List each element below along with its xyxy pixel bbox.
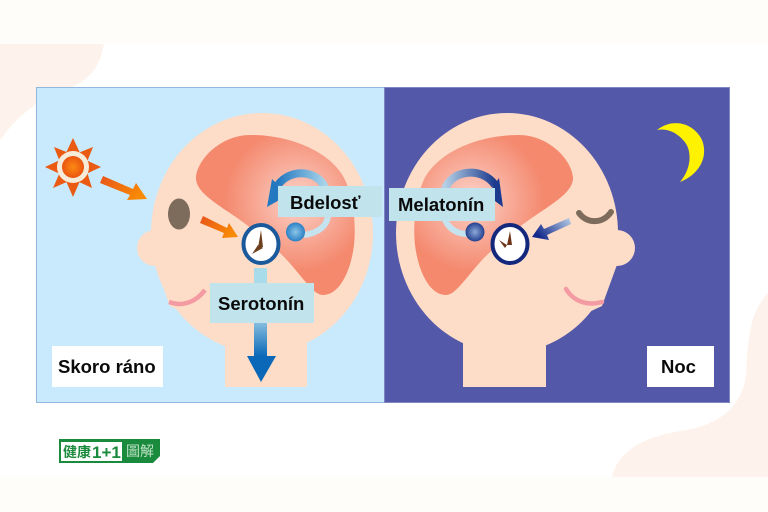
logo (59, 439, 160, 463)
cycle arrow: melatonin (445, 173, 503, 234)
mouth: morning (169, 290, 205, 304)
arrow: eye to clock (200, 216, 238, 238)
eye: open (168, 198, 190, 230)
brain: morning (196, 135, 355, 295)
logo: 健康 (63, 444, 91, 460)
mouth: night (566, 289, 602, 303)
background blob: bottom right (612, 293, 768, 477)
eye: closed (579, 212, 611, 221)
background blob: top left (0, 44, 104, 140)
label: Bdelosť (278, 186, 382, 217)
logo: 圖解 (126, 443, 154, 459)
cycle arrow: wakefulness (267, 173, 328, 235)
icon: moon (657, 123, 704, 182)
head: night (396, 113, 635, 387)
label: Bdelosť: Bdelosť (290, 192, 361, 213)
label: Noc: Noc (661, 356, 696, 377)
logo: 1+1 (92, 443, 121, 462)
icon: sun (45, 138, 101, 197)
clock: morning (244, 225, 278, 263)
panel: early morning (36, 88, 384, 402)
panel: night (384, 88, 730, 402)
clock: night (492, 225, 528, 263)
label: Skoro ráno: Skoro ráno (58, 356, 156, 377)
head: morning (137, 113, 373, 387)
label: Serotonín (210, 283, 314, 323)
ball: melatonin (466, 222, 484, 242)
label: Melatonín (389, 188, 495, 221)
label: Serotonín: Serotonín (218, 293, 304, 314)
arrow: sunlight to head (100, 176, 147, 200)
label: Melatonín: Melatonín (398, 194, 484, 215)
label: Skoro ráno (52, 346, 163, 387)
arrow: serotonin down (247, 268, 276, 382)
arrow: eye to clock, night (532, 218, 571, 240)
brain: night (414, 135, 573, 295)
ball: serotonin (286, 222, 305, 242)
label: Noc (647, 346, 714, 387)
